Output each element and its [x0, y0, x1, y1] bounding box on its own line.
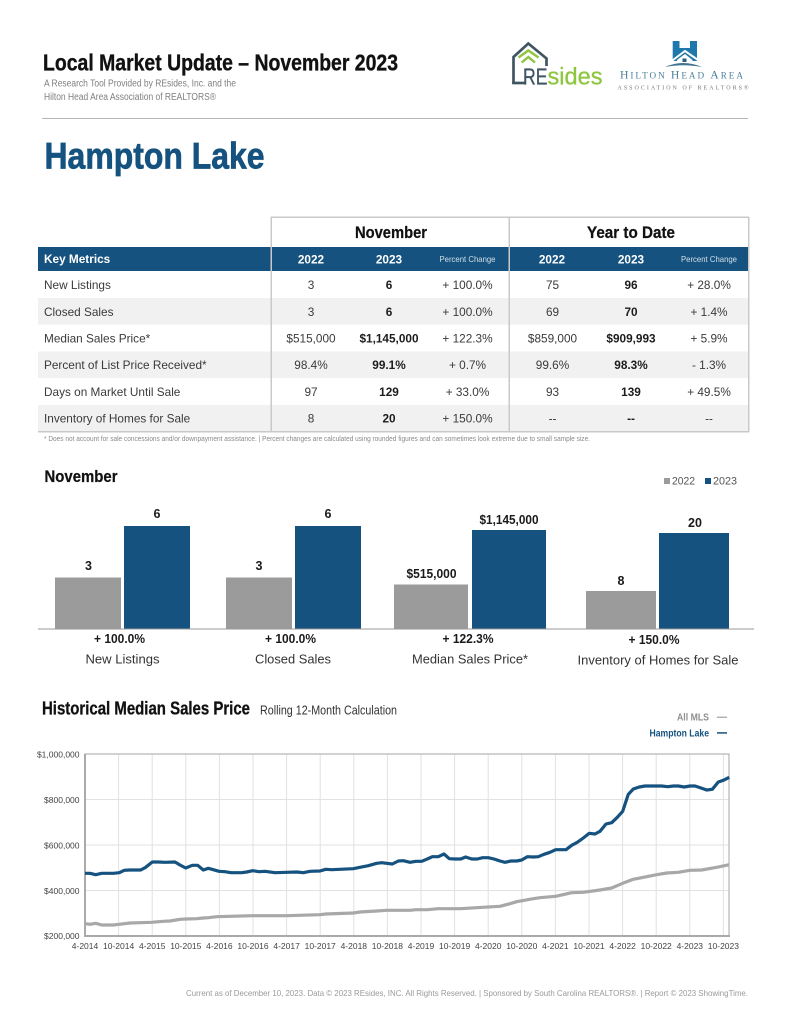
table header band: 2023	[376, 252, 403, 266]
y axis labels	[37, 750, 80, 941]
x axis labels: 10-2019	[439, 941, 470, 951]
row: Inventory of Homes for Sale: Inventory of Homes for Sale	[44, 412, 191, 426]
percent change labels	[94, 632, 680, 647]
row: New Listings: + 28.0%	[687, 278, 731, 292]
y axis labels: $400,000	[44, 886, 80, 896]
key metrics table	[38, 216, 750, 432]
row: Days on Market Until Sale: Days on Market Until Sale	[44, 385, 181, 399]
x axis labels: 10-2018	[372, 941, 403, 951]
x axis labels: 10-2022	[641, 941, 672, 951]
row: Inventory of Homes for Sale: 8	[308, 412, 315, 426]
row: New Listings: 3	[308, 278, 315, 292]
percent change labels: + 122.3%	[442, 632, 494, 646]
percent change labels: + 100.0%	[265, 632, 316, 646]
table zebra rows	[38, 298, 749, 432]
table column headers: November	[355, 223, 427, 242]
x axis labels: 4-2016	[206, 941, 233, 951]
line chart legend: Hampton Lake	[650, 728, 709, 740]
row: New Listings: New Listings	[44, 278, 111, 292]
row: Median Sales Price: $515,000	[286, 332, 336, 346]
heading: Historical Median Sales Price: Historical Median Sales Price	[42, 698, 250, 718]
row: Closed Sales: 6	[386, 305, 393, 319]
row: Days on Market Until Sale	[44, 385, 731, 399]
chart gridlines	[85, 754, 729, 936]
x axis	[84, 935, 730, 937]
row: Percent of List Price Received: 98.3%	[614, 358, 648, 372]
x axis labels: 4-2019	[408, 941, 435, 951]
row: Closed Sales: + 100.0%	[442, 305, 493, 319]
table header band: 2022	[298, 252, 325, 266]
x axis labels: 4-2023	[677, 941, 703, 951]
row: Inventory of Homes for Sale: --	[705, 412, 713, 426]
subtitle	[44, 79, 236, 103]
x axis labels: 4-2020	[475, 941, 502, 951]
x axis labels: 10-2015	[170, 941, 202, 951]
row: Days on Market Until Sale: 139	[621, 385, 641, 399]
line chart: historical median sales price	[37, 750, 739, 951]
bars: Closed Sales: 6	[325, 507, 332, 521]
row: Closed Sales: Closed Sales	[44, 305, 114, 319]
row: Closed Sales: + 1.4%	[690, 305, 728, 319]
metric names: New Listings	[86, 652, 160, 666]
heading: Hampton Lake: Hampton Lake	[44, 134, 264, 176]
line chart legend: All MLS	[677, 712, 709, 724]
table column headers	[355, 223, 675, 242]
metric names: Median Sales Price*	[412, 652, 528, 666]
bars: Median Sales Price	[394, 513, 546, 629]
bars: Inventory of Homes for Sale: 8	[618, 574, 625, 588]
bar chart: November comparison	[38, 507, 754, 668]
row: Percent of List Price Received: + 0.7%	[449, 358, 487, 372]
row: New Listings: 96	[624, 278, 638, 292]
logo: Hilton Head Area Association of Realtors	[618, 41, 749, 92]
bar chart legend	[664, 476, 737, 488]
table column headers: Year to Date	[587, 223, 675, 242]
x axis labels: 10-2016	[237, 941, 269, 951]
row: Median Sales Price: + 5.9%	[690, 332, 728, 346]
line: All MLS	[85, 865, 729, 925]
row: New Listings: 75	[546, 278, 559, 292]
row: Percent of List Price Received: 99.6%	[536, 358, 570, 372]
bar chart baseline	[38, 628, 754, 630]
row: Percent of List Price Received: 99.1%	[372, 358, 406, 372]
row: Days on Market Until Sale: 129	[379, 385, 399, 399]
row: Percent of List Price Received: 98.4%	[294, 358, 328, 372]
bar chart legend: 2023	[713, 476, 737, 488]
y axis labels: $800,000	[44, 795, 80, 805]
x axis labels: 10-2014	[103, 941, 134, 951]
line: Hampton Lake	[85, 777, 729, 875]
metric names: Inventory of Homes for Sale	[578, 652, 738, 668]
x axis labels: 4-2014	[72, 941, 99, 951]
row: Closed Sales: 69	[546, 305, 559, 319]
row: Median Sales Price: $1,145,000	[359, 332, 419, 346]
row: Closed Sales: 3	[308, 305, 315, 319]
row: Percent of List Price Received	[44, 358, 727, 372]
row: Inventory of Homes for Sale: 20	[382, 412, 396, 426]
line chart legend	[650, 712, 727, 740]
bars: New Listings: 6	[154, 507, 161, 521]
x axis labels: 4-2017	[273, 941, 300, 951]
row: Median Sales Price	[44, 332, 728, 346]
y axis labels: $1,000,000	[37, 750, 80, 760]
heading: Historical Median Sales Price: Rolling 12-Month Calculation	[260, 704, 397, 718]
row: New Listings: 6	[386, 278, 393, 292]
table header band: Key Metrics	[44, 252, 111, 266]
x axis labels: 10-2021	[573, 941, 605, 951]
footer: Current as of December 10, 2023. Data © 2023 REsides, INC. All Rights Reserved. | Sponsored by South Carolina REALTORS®. | Report © 2023 ShowingTime.	[186, 988, 748, 998]
row: Median Sales Price: + 122.3%	[442, 332, 493, 346]
bars: New Listings	[55, 507, 190, 629]
bars: Closed Sales	[226, 507, 361, 629]
page header	[43, 50, 398, 103]
logo: REsides: RE	[523, 63, 548, 89]
table header band: 2023	[618, 252, 645, 266]
row: Days on Market Until Sale: 97	[304, 385, 318, 399]
row: Days on Market Until Sale: + 49.5%	[687, 385, 731, 399]
row: Inventory of Homes for Sale	[44, 412, 713, 426]
y axis	[84, 754, 86, 936]
bars: Inventory of Homes for Sale: 20	[688, 516, 702, 530]
subtitle: Hilton Head Area Association of REALTORS®	[44, 92, 217, 103]
header divider	[42, 118, 748, 119]
bars: Closed Sales: 3	[256, 559, 263, 573]
table header band: Percent Change	[440, 254, 496, 264]
x axis labels	[72, 941, 739, 951]
row: Days on Market Until Sale: 93	[546, 385, 559, 399]
x axis labels: 4-2018	[341, 941, 367, 951]
metric names: Closed Sales	[255, 652, 331, 666]
row: Inventory of Homes for Sale: --	[627, 412, 635, 426]
x axis labels: 4-2021	[542, 941, 569, 951]
bars: Inventory of Homes for Sale	[586, 516, 729, 629]
bars: Median Sales Price: $1,145,000	[480, 513, 539, 527]
logo: REsides	[512, 44, 602, 90]
bar chart legend: 2022	[672, 476, 695, 488]
percent change labels: + 150.0%	[628, 633, 680, 647]
x axis labels: 10-2023	[708, 941, 739, 951]
percent change labels: + 100.0%	[94, 632, 145, 646]
bars: New Listings: 3	[85, 559, 92, 573]
y axis labels: $600,000	[44, 840, 80, 850]
logo: Hilton Head Area Association of Realtors: HILTON HEAD AREA	[620, 69, 743, 82]
logo: REsides: sides	[548, 63, 602, 90]
table header band: 2022	[539, 252, 566, 266]
table header band: Percent Change	[681, 254, 737, 264]
metric names	[86, 652, 738, 668]
row: Inventory of Homes for Sale: + 150.0%	[442, 412, 493, 426]
row: Closed Sales: 70	[624, 305, 638, 319]
x axis labels: 10-2017	[305, 941, 336, 951]
heading: November: November	[44, 467, 118, 486]
title: Local Market Update – November 2023	[43, 50, 398, 76]
table footnote: * Does not account for sale concessions and/or downpayment assistance. | Percent changes are calculated using rounded figures and can sometimes look extreme due to small sample size.	[44, 436, 590, 443]
row: Median Sales Price: $859,000	[528, 332, 578, 346]
table header band	[38, 247, 749, 271]
y axis labels: $200,000	[44, 931, 80, 941]
bars: Median Sales Price: $515,000	[406, 567, 457, 581]
row: Median Sales Price: Median Sales Price*	[44, 332, 151, 346]
row: Percent of List Price Received: - 1.3%	[692, 358, 727, 372]
row: New Listings	[44, 278, 731, 292]
x axis labels: 10-2020	[506, 941, 538, 951]
logo: Hilton Head Area Association of Realtors: ASSOCIATION OF REALTORS®	[618, 84, 749, 92]
row: New Listings: + 100.0%	[442, 278, 493, 292]
row: Median Sales Price: $909,993	[606, 332, 656, 346]
row: Percent of List Price Received: Percent of List Price Received*	[44, 358, 207, 372]
row: Days on Market Until Sale: + 33.0%	[446, 385, 490, 399]
table borders	[38, 216, 750, 432]
x axis labels: 4-2015	[139, 941, 166, 951]
x axis labels: 4-2022	[609, 941, 636, 951]
row: Closed Sales	[44, 305, 728, 319]
subtitle: A Research Tool Provided by REsides, Inc. and the	[44, 79, 236, 90]
row: Inventory of Homes for Sale: --	[549, 412, 556, 426]
chart frame	[85, 754, 729, 936]
